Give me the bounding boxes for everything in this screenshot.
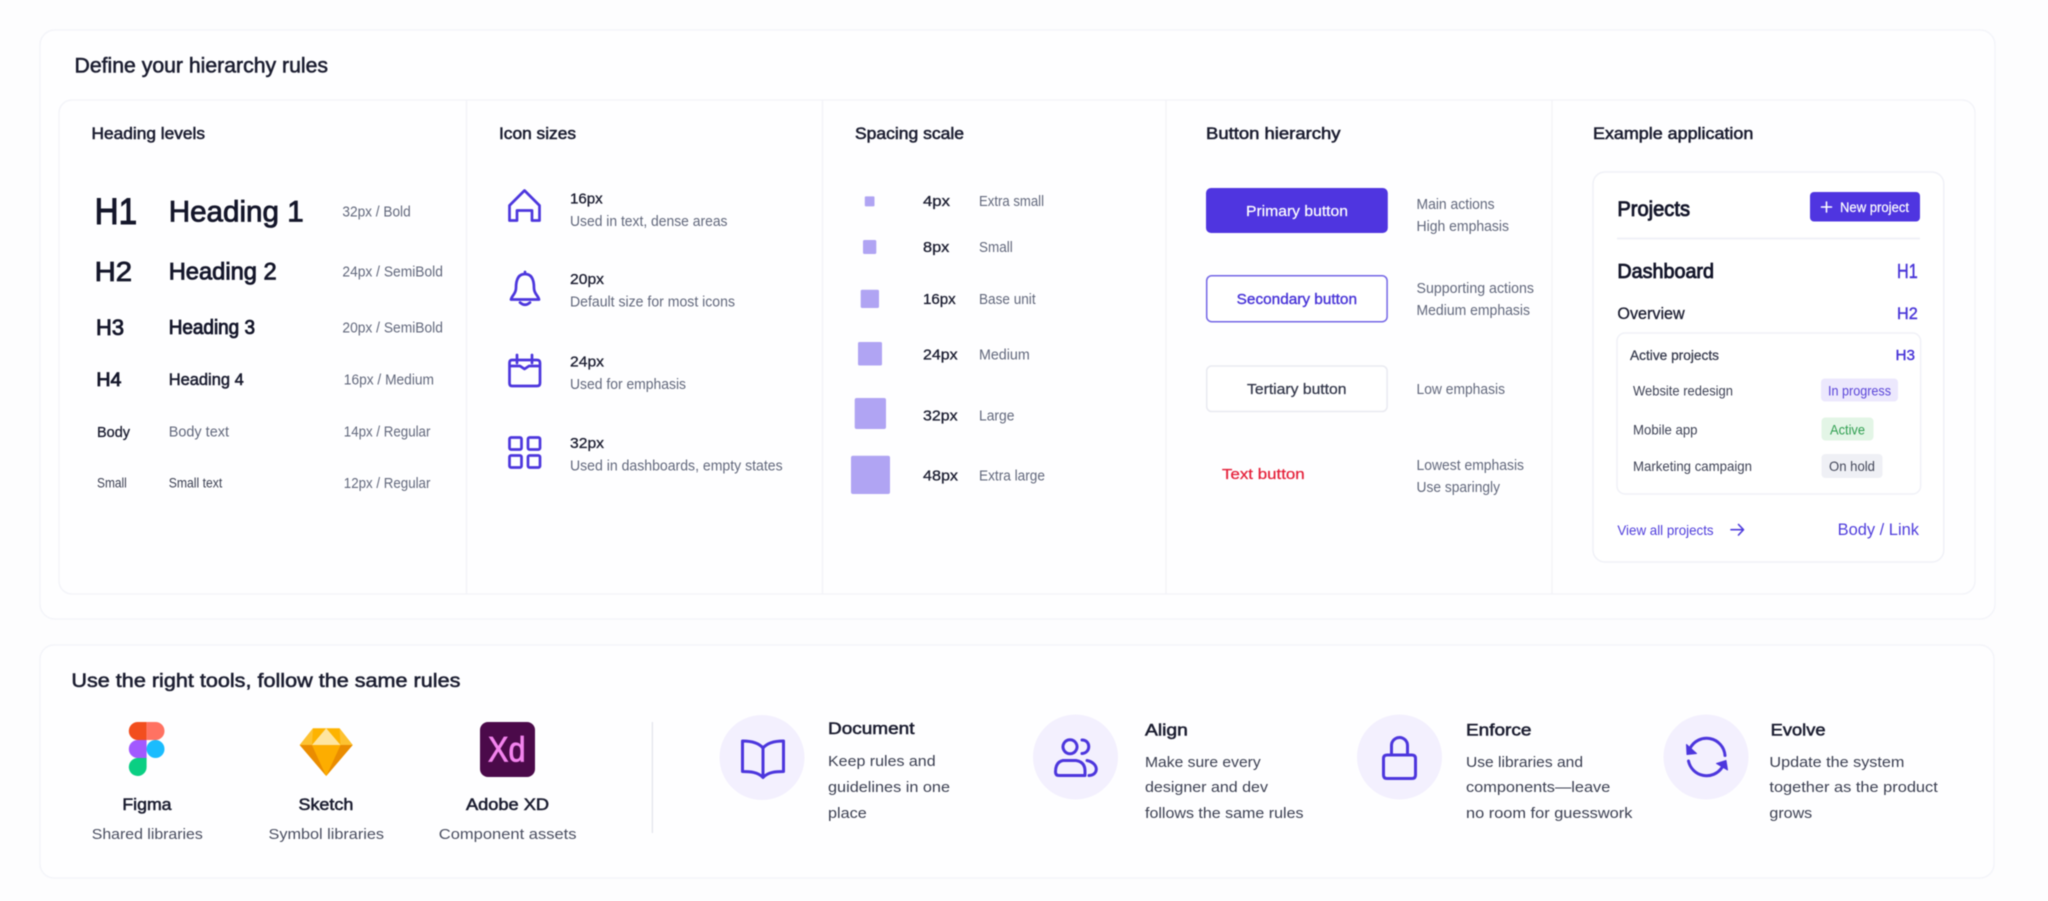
step: align (1033, 714, 1304, 822)
panel: spacing scale (851, 125, 1045, 494)
row: small: Small text (169, 476, 223, 490)
row: 8px (863, 239, 1013, 256)
text: tertiary usage: Low emphasis (1416, 382, 1505, 398)
row: 24px: 24px (923, 346, 958, 364)
row: H2: H2 (95, 256, 132, 287)
tool: adobe xd: Adobe XD (466, 796, 549, 814)
app title: projects: Projects (1617, 198, 1690, 221)
step: enforce: no room for guesswork (1466, 805, 1633, 822)
icon: calendar (510, 355, 540, 386)
button: secondary (1207, 276, 1387, 322)
row: H3: 20px / SemiBold (342, 320, 443, 336)
row: H4 (96, 370, 434, 391)
step: document: guidelines in one (828, 779, 950, 796)
row: 16px: Base unit (979, 292, 1036, 308)
heading: button hierarchy: Button hierarchy (1206, 125, 1341, 143)
row: 32px: 32px (923, 408, 958, 425)
title: define your hierarchy rules: Define your hierarchy rules (74, 54, 328, 78)
row: 4px (865, 193, 1044, 210)
text: 20px icon (570, 271, 735, 310)
panel: button hierarchy (1206, 125, 1534, 496)
tool: figma: Shared libraries (92, 826, 203, 843)
panel: icon sizes (499, 125, 783, 474)
active projects box (1617, 333, 1921, 494)
row: dashboard H1 (1617, 260, 1918, 283)
icon: lock (1384, 738, 1416, 778)
step: align: follows the same rules (1145, 805, 1304, 822)
button: secondary: Secondary button (1237, 291, 1357, 308)
tool: figma (92, 722, 203, 843)
row: 8px: 8px (923, 239, 950, 256)
row: H3: H3 (96, 315, 124, 340)
text: primary usage: Main actions (1416, 197, 1495, 213)
link: view all projects: View all projects (1617, 522, 1714, 538)
step: align: Align (1145, 720, 1188, 740)
row: marketing campaign: Marketing campaign (1633, 458, 1752, 474)
step: align: designer and dev (1145, 779, 1269, 796)
step: enforce: Use libraries and (1466, 754, 1583, 771)
text: secondary usage: Medium emphasis (1416, 303, 1530, 319)
heading: icon sizes: Icon sizes (499, 125, 576, 143)
row: website redesign: In progress (1828, 382, 1891, 398)
icon: book (742, 741, 784, 778)
panel: heading levels (92, 125, 443, 492)
row: H2: Heading 2 (169, 258, 277, 286)
row: mobile app: Mobile app (1633, 422, 1698, 438)
row: 4px: 4px (923, 193, 951, 210)
row: small (97, 476, 431, 492)
row: 48px: 48px (923, 468, 959, 485)
row: H3: Heading 3 (169, 317, 255, 339)
row: overview H2 (1617, 304, 1918, 323)
text: 16px icon: 16px (570, 190, 603, 208)
row: H4: H4 (96, 370, 122, 391)
row: H4: 16px / Medium (344, 372, 434, 388)
row: small: Small (97, 476, 127, 490)
step: evolve: Evolve (1771, 720, 1826, 740)
heading: spacing scale: Spacing scale (855, 125, 964, 143)
app card (1593, 172, 1944, 562)
step: enforce: Enforce (1466, 720, 1531, 740)
step: document: place (828, 805, 867, 822)
row: marketing campaign (1633, 454, 1882, 478)
icon: figma logo (129, 722, 164, 776)
text: 32px icon: 32px (570, 435, 605, 452)
button: text: Text button (1222, 466, 1305, 483)
text: 20px icon: 20px (570, 271, 605, 288)
row: 8px: Small (979, 240, 1013, 256)
text: 24px icon: 24px (570, 354, 605, 370)
icon: users (1056, 740, 1096, 776)
icon: adobe xd logo: Xd (488, 730, 526, 770)
text: 32px icon (570, 435, 783, 474)
row: active projects H3 (1630, 347, 1915, 364)
step: document: Keep rules and (828, 753, 936, 770)
row: body: Body (97, 425, 131, 441)
row: active projects H3: H3 (1896, 347, 1915, 364)
heading: heading levels: Heading levels (92, 125, 205, 143)
button: new project: New project (1840, 200, 1909, 215)
text: 16px icon (570, 190, 728, 230)
text: primary usage (1416, 197, 1509, 235)
icon: bell (511, 272, 539, 305)
text: 16px icon: Used in text, dense areas (570, 214, 728, 230)
panel: example application (1593, 125, 1944, 562)
button: tertiary: Tertiary button (1247, 381, 1346, 398)
title: use the right tools: Use the right tools, follow the same rules (71, 670, 461, 692)
step: align: Make sure every (1145, 754, 1261, 771)
row: H1: H1 (95, 191, 137, 232)
tool: figma: Figma (122, 796, 172, 814)
row: 24px: Medium (979, 348, 1030, 364)
row: dashboard H1: H1 (1897, 261, 1918, 283)
row: body (97, 424, 431, 441)
text: text button usage: Lowest emphasis (1416, 458, 1524, 474)
panel: hierarchy rules card (40, 30, 1995, 619)
row: small: 12px / Regular (344, 476, 431, 492)
row: H2: 24px / SemiBold (342, 264, 443, 280)
label: body / link: Body / Link (1838, 521, 1920, 539)
step: enforce (1357, 714, 1633, 822)
button: tertiary (1207, 366, 1387, 412)
step: evolve: Update the system (1769, 754, 1904, 771)
heading: example application: Example application (1593, 125, 1753, 143)
tool: sketch (268, 728, 384, 843)
row: H2 (95, 256, 443, 287)
row: H3 (96, 315, 443, 340)
step: enforce: components—leave (1466, 779, 1610, 796)
row: website redesign: Website redesign (1633, 382, 1733, 398)
tool: adobe xd (439, 722, 576, 843)
text: secondary usage: Supporting actions (1416, 281, 1534, 297)
text: 20px icon: Default size for most icons (570, 294, 735, 310)
text: 32px icon: Used in dashboards, empty states (570, 458, 783, 474)
button: primary (1206, 188, 1388, 233)
step: document (720, 715, 950, 822)
row: 16px: 16px (923, 291, 956, 308)
row: H1 (95, 191, 411, 232)
row: body: 14px / Regular (344, 424, 431, 440)
text: text button usage (1416, 458, 1524, 496)
panel: inner rules container (59, 100, 1975, 594)
tool: adobe xd: Component assets (439, 826, 576, 843)
row: mobile app: Active (1830, 422, 1865, 438)
row: 32px (855, 398, 1014, 429)
icon: refresh (1686, 738, 1728, 776)
row: H4: Heading 4 (169, 370, 244, 389)
row: overview H2: Overview (1617, 304, 1685, 323)
row: H1: 32px / Bold (342, 204, 411, 220)
row: website redesign (1633, 378, 1898, 402)
row: H1: Heading 1 (169, 196, 304, 228)
text: primary usage: High emphasis (1416, 219, 1509, 235)
icon: house (510, 190, 540, 220)
row: overview H2: H2 (1897, 304, 1918, 323)
row: 16px (861, 290, 1036, 308)
step: document: Document (828, 719, 915, 738)
text: 24px icon: Used for emphasis (570, 377, 686, 393)
step: evolve: grows (1769, 805, 1812, 822)
icon: grid (510, 438, 540, 468)
step: evolve: together as the product (1769, 779, 1939, 796)
row: 32px: Large (979, 409, 1014, 425)
row: mobile app (1633, 418, 1874, 440)
text: 24px icon (570, 354, 686, 393)
row: 48px: Extra large (979, 469, 1045, 485)
button: new project (1810, 192, 1920, 222)
row: body: Body text (169, 424, 229, 440)
row: active projects H3: Active projects (1630, 347, 1719, 363)
step: evolve (1664, 714, 1939, 822)
row: dashboard H1: Dashboard (1617, 260, 1714, 283)
row: marketing campaign: On hold (1829, 458, 1875, 474)
row: 24px (858, 342, 1030, 366)
row: 4px: Extra small (979, 194, 1044, 210)
text: text button usage: Use sparingly (1416, 480, 1501, 496)
icon: sketch logo (300, 728, 353, 776)
button: primary: Primary button (1246, 203, 1348, 220)
tool: sketch: Symbol libraries (268, 826, 384, 843)
tool: sketch: Sketch (298, 796, 353, 814)
row: 48px (851, 456, 1045, 494)
text: secondary usage (1416, 281, 1534, 319)
panel: tools and rules card (40, 645, 1994, 878)
